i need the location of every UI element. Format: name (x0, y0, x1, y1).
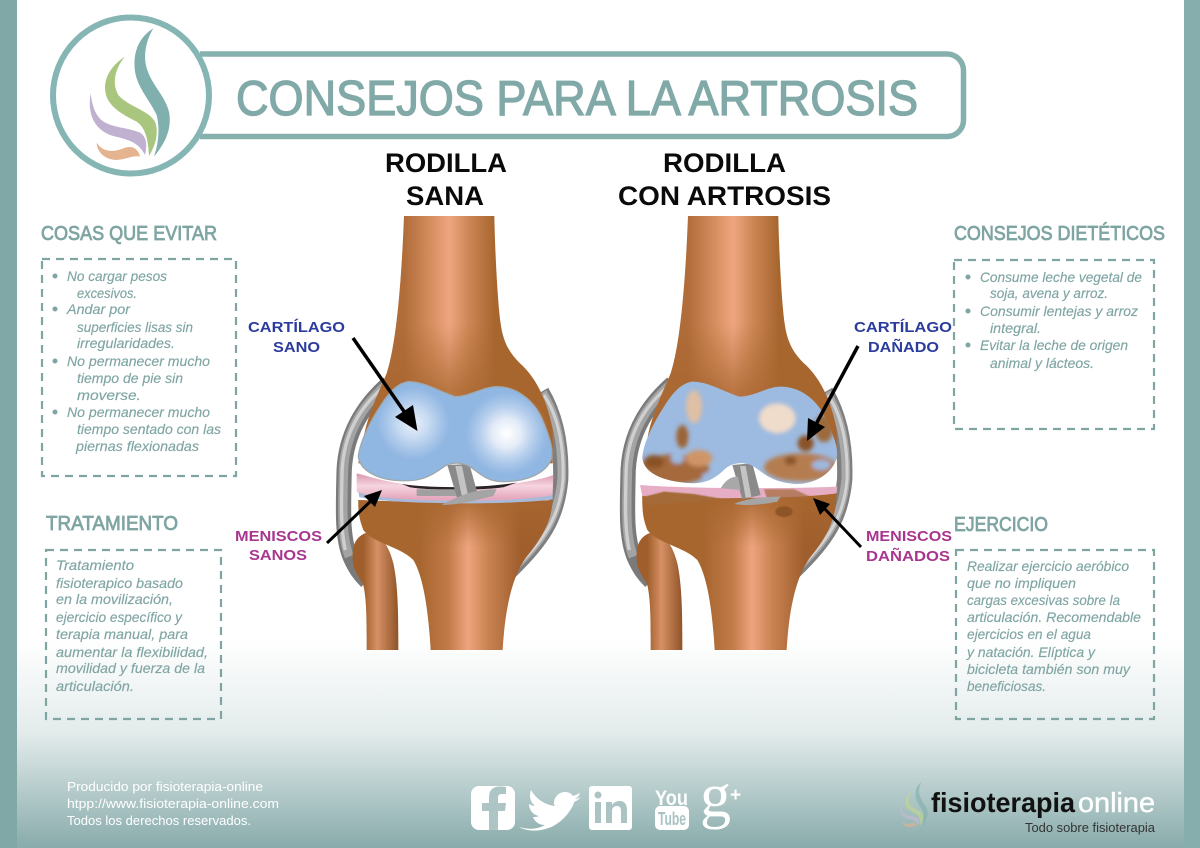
text: ejercicio (966, 558, 1141, 694)
arrow: cartilago danado (807, 346, 858, 441)
label: cartilago danado: CARTÍLAGO (854, 319, 952, 336)
text: ejercicio: ejercicios en el agua (967, 626, 1091, 642)
arrow: meniscos danados (813, 498, 861, 547)
icon: google plus: g (700, 762, 731, 830)
panel: cosas que evitar (41, 222, 236, 476)
text: ejercicio: beneficiosas. (967, 678, 1046, 694)
text: tratamiento: en la movilización, (56, 591, 173, 607)
footer credits (67, 780, 279, 828)
list: cosas que evitar: piernas flexionadas (75, 438, 199, 454)
logo: fisioterapia online (900, 782, 1156, 835)
heading: rodilla con artrosis: RODILLA (663, 148, 786, 178)
list: consejos dieteticos (966, 269, 1142, 371)
arrow: cartilago sano (353, 338, 418, 431)
knee illustration: osteoarthritis (626, 216, 847, 650)
title frame (200, 54, 964, 136)
left side band (0, 0, 17, 848)
text: ejercicio: y natación. Elíptica y (966, 644, 1096, 660)
list: cosas que evitar: Andar por (66, 301, 131, 317)
text: ejercicio: Realizar ejercicio aeróbico (967, 558, 1129, 574)
label: meniscos sanos: MENISCOS (235, 528, 322, 545)
list: consejos dieteticos: animal y lácteos. (990, 355, 1094, 371)
list: cosas que evitar: No permanecer mucho (67, 404, 210, 420)
footer credits: htpp://www.fisioterapia-online.com (67, 797, 279, 811)
logo: fisioterapia online: fisioterapia (931, 787, 1075, 818)
panel: consejos dieteticos (954, 222, 1165, 429)
icon: google plus: + (730, 785, 741, 806)
heading: cosas que evitar: COSAS QUE EVITAR (41, 222, 217, 245)
icon: small logo swoosh (900, 782, 928, 827)
title: CONSEJOS PARA LA ARTROSIS (236, 72, 918, 126)
list: cosas que evitar: tiempo de pie sin (77, 370, 183, 386)
label: cartilago danado (854, 319, 952, 356)
heading: tratamiento: TRATAMIENTO (46, 512, 178, 535)
dashed box: cosas que evitar (42, 259, 236, 476)
panel: ejercicio (954, 513, 1154, 719)
text: tratamiento: movilidad y fuerza de la (56, 660, 205, 676)
label: meniscos sanos (235, 528, 322, 564)
icon: logo circle (53, 18, 209, 174)
icon: youtube: Tube (658, 809, 686, 829)
icon: youtube: You (655, 787, 688, 810)
list: cosas que evitar: superficies lisas sin (77, 319, 193, 335)
icon: facebook (471, 786, 515, 830)
text: tratamiento (56, 557, 208, 694)
text: tratamiento: terapia manual, para (56, 626, 188, 642)
right side band (1184, 0, 1200, 848)
text: tratamiento: ejercicio específico y (56, 609, 183, 625)
label: cartilago sano: CARTÍLAGO (248, 319, 345, 336)
list: cosas que evitar: irregularidades. (77, 335, 175, 351)
icon: linkedin (589, 786, 632, 830)
icon: twitter (519, 790, 581, 831)
heading: ejercicio: EJERCICIO (954, 513, 1048, 536)
list: consejos dieteticos: integral. (990, 320, 1041, 336)
list: cosas que evitar (52, 268, 221, 454)
label: cartilago danado: DAÑADO (868, 338, 939, 356)
text: tratamiento: articulación. (56, 678, 134, 694)
text: tratamiento: aumentar la flexibilidad, (56, 644, 208, 660)
heading: rodilla sana: RODILLA (385, 148, 507, 178)
list: cosas que evitar: tiempo sentado con las (77, 421, 221, 437)
dashed box: tratamiento (46, 550, 221, 719)
label: cartilago sano (248, 319, 345, 356)
list: consejos dieteticos: Consumir lentejas y arroz (980, 303, 1138, 319)
label: cartilago sano: SANO (273, 339, 320, 356)
heading: rodilla sana (385, 148, 507, 211)
text: tratamiento: Tratamiento (56, 557, 134, 573)
heading: consejos dieteticos: CONSEJOS DIETÉTICOS (954, 222, 1165, 245)
panel: tratamiento (46, 512, 221, 719)
label: meniscos sanos: SANOS (249, 547, 307, 564)
arrow: meniscos sanos (327, 490, 382, 543)
dashed box: ejercicio (956, 550, 1154, 719)
list: consejos dieteticos: Evitar la leche de origen (980, 337, 1128, 353)
footer credits: Producido por fisioterapia-online (67, 780, 263, 794)
text: ejercicio: bicicleta también son muy (967, 661, 1131, 677)
list: cosas que evitar: No permanecer mucho (67, 353, 210, 369)
knee illustration: healthy (342, 216, 563, 650)
text: ejercicio: cargas excesivas sobre la (967, 592, 1120, 608)
logo: fisioterapia online: online (1078, 787, 1155, 818)
list: cosas que evitar: excesivos. (77, 285, 137, 301)
text: tratamiento: fisioterapico basado (56, 575, 183, 591)
list: consejos dieteticos: soja, avena y arroz. (990, 285, 1108, 301)
list: cosas que evitar: No cargar pesos (67, 268, 167, 284)
list: consejos dieteticos: Consume leche vegetal de (980, 269, 1142, 285)
icon: youtube (655, 787, 689, 830)
list: cosas que evitar: moverse. (77, 387, 141, 403)
heading: rodilla con artrosis: CON ARTROSIS (618, 181, 831, 211)
label: meniscos danados: MENISCOS (866, 528, 952, 545)
heading: rodilla sana: SANA (406, 181, 484, 211)
label: meniscos danados (866, 528, 952, 565)
dashed box: consejos dieteticos (954, 260, 1154, 429)
text: ejercicio: articulación. Recomendable (967, 609, 1141, 625)
label: meniscos danados: DAÑADOS (866, 547, 950, 565)
logo: fisioterapia online: Todo sobre fisioterapia (1025, 820, 1156, 835)
text: ejercicio: que no impliquen (967, 575, 1076, 591)
heading: rodilla con artrosis (618, 148, 831, 211)
footer credits: Todos los derechos reservados. (67, 814, 251, 828)
